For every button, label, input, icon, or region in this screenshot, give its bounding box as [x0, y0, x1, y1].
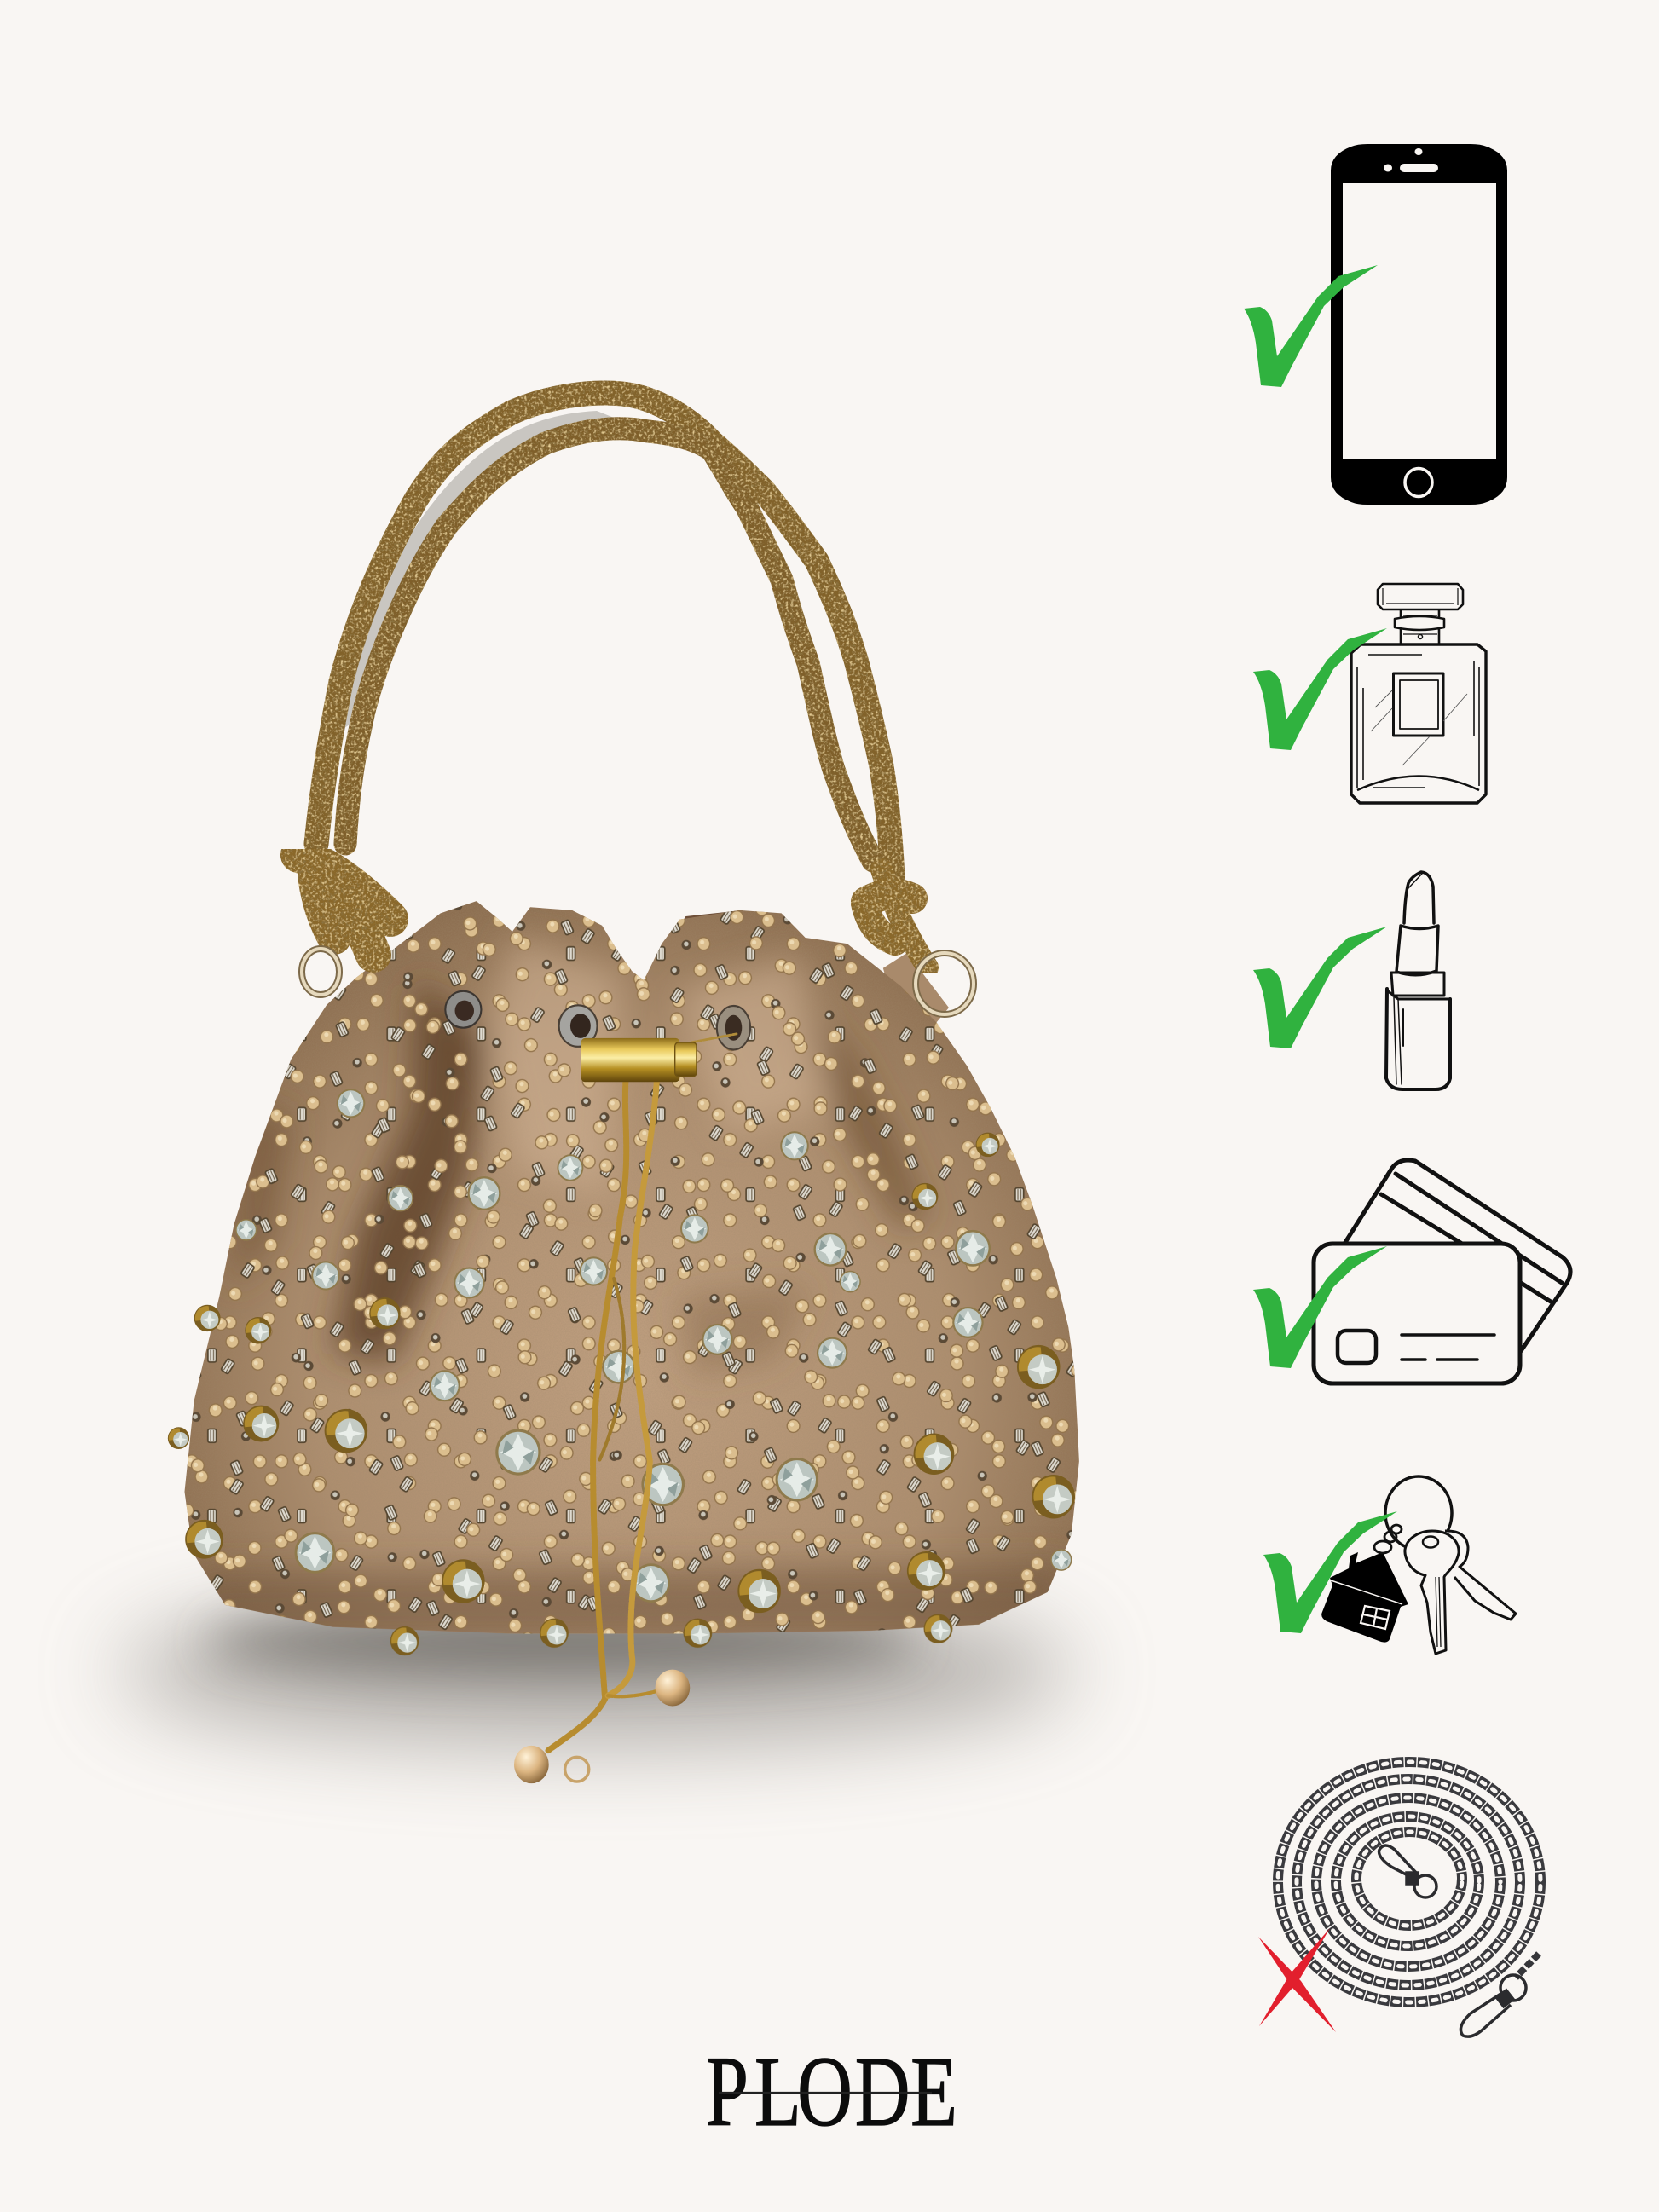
grey gap behind handle: [337, 411, 614, 733]
right strap tab: [883, 953, 949, 1029]
chain coils: [1278, 1762, 1540, 2002]
icon: red cross: [1258, 1928, 1336, 2032]
icon: green check mobile: [1244, 265, 1378, 387]
logo wordmark: PLODE: [706, 2036, 957, 2147]
handle knots: [298, 855, 928, 967]
key ring: [1385, 1476, 1452, 1550]
key fob links: [1374, 1525, 1402, 1553]
icon: green check cards: [1253, 1246, 1387, 1368]
icon: green check lipstick: [1253, 927, 1387, 1048]
suede folds and shading: [153, 852, 1091, 1705]
infographic canvas: [95, 144, 1573, 2127]
chain tail: [1516, 1954, 1539, 1978]
icon: lipstick: [1386, 872, 1450, 1089]
rhinestones: [168, 1089, 1075, 1655]
eyelets: [445, 991, 750, 1049]
icon: perfume bottle: [1351, 584, 1486, 803]
bag body: [153, 852, 1091, 1783]
snap hook inner: [1379, 1845, 1436, 1897]
suede bag shape: [184, 901, 1079, 1633]
diagonal key: [1445, 1531, 1516, 1620]
icon: bank cards: [1314, 1160, 1570, 1383]
bag handle: [316, 393, 893, 878]
bag floor shadow: [119, 1598, 1074, 1743]
back flap interior: [662, 910, 743, 956]
drawstring chains: [548, 1034, 737, 1751]
icon: green check perfume: [1253, 628, 1387, 750]
gold clasp: [581, 1038, 697, 1082]
house fob: [1321, 1552, 1408, 1643]
icon: metal shoulder chain: [1278, 1762, 1540, 2036]
chain end balls: [514, 1670, 690, 1783]
vertical key: [1405, 1531, 1459, 1654]
snap hook outer: [1460, 1975, 1526, 2036]
icon: green check keys: [1263, 1511, 1397, 1633]
icon: phone: [1331, 144, 1507, 505]
metal rings: [302, 949, 974, 1014]
bead scatter: [188, 914, 1069, 1629]
icon: house keychain and keys: [1321, 1476, 1516, 1654]
chain link holes: [1278, 1762, 1540, 2002]
